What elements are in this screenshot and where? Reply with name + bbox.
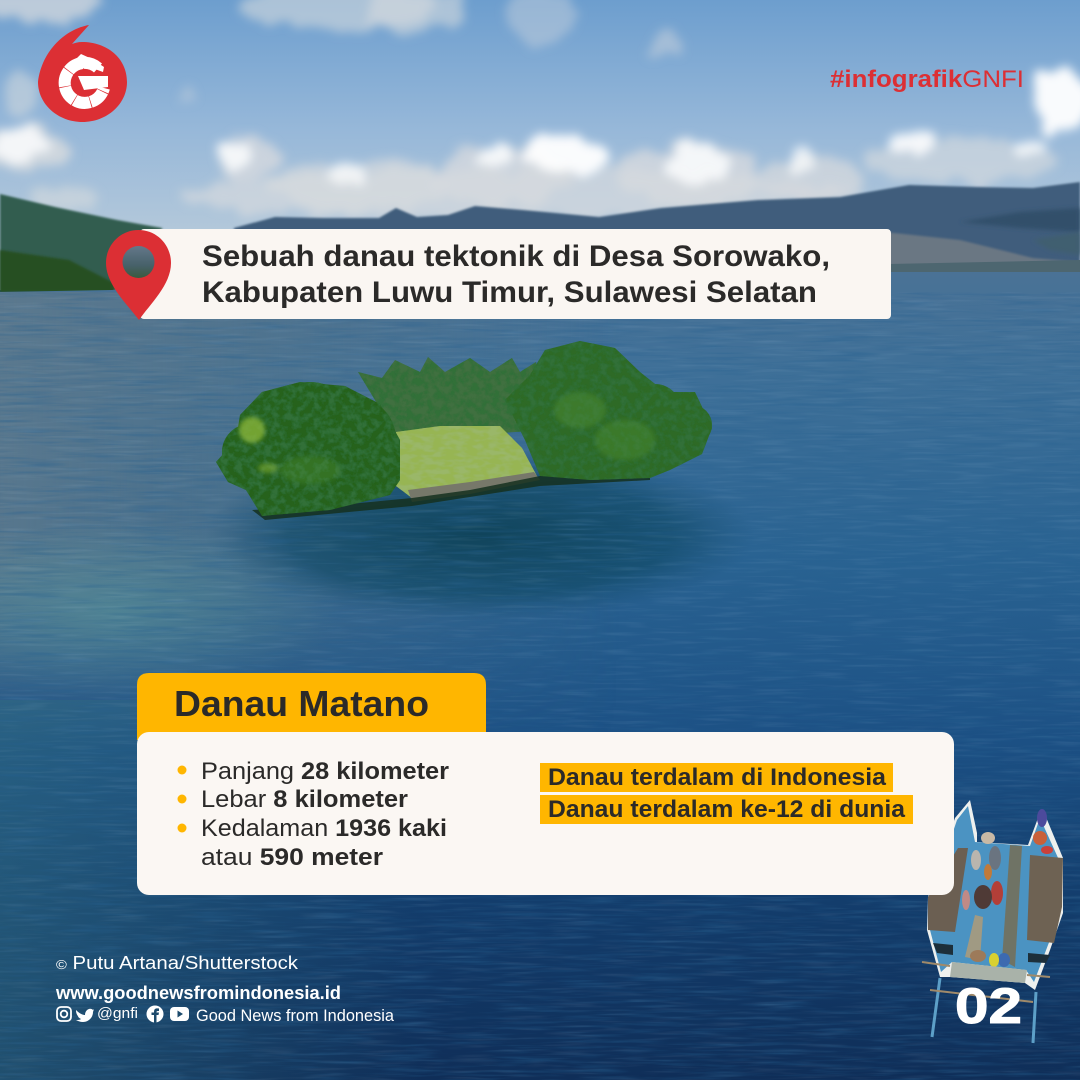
palms	[358, 357, 545, 440]
left hill forest	[0, 250, 114, 292]
emblem ring	[65, 63, 104, 103]
page number: 02	[955, 978, 1022, 1034]
shoreline shadow	[252, 474, 650, 520]
left roof	[928, 848, 968, 932]
icon: instagram	[57, 1007, 71, 1021]
highlight 1: Danau terdalam di Indonesia	[548, 764, 887, 791]
fact: depth: Kedalaman 1936 kaki	[201, 815, 447, 842]
clouds	[0, 0, 1080, 220]
hulls	[927, 800, 1063, 990]
lake water	[0, 272, 1080, 1080]
facts list	[178, 758, 449, 871]
website: www.goodnewsfromindonesia.id	[55, 983, 341, 1003]
left tree	[216, 382, 400, 516]
bullets	[178, 766, 186, 832]
right roof	[1027, 855, 1063, 943]
outrigger poles	[922, 962, 1050, 1002]
rocks	[408, 472, 540, 502]
panel: Danau Matano	[137, 673, 954, 895]
boat	[922, 800, 1063, 1043]
banner panel	[140, 229, 891, 319]
logo emblem	[65, 54, 108, 103]
fact: length: Panjang 28 kilometer	[201, 758, 449, 785]
banner line 1: Sebuah danau tektonik di Desa Sorowako,	[202, 240, 830, 273]
icon: map pin	[106, 230, 171, 320]
mountain lower slopes	[885, 232, 1080, 272]
foliage highlights	[239, 392, 655, 484]
stern rail	[950, 962, 1027, 983]
fact: depth metres: atau 590 meter	[201, 844, 383, 871]
brand name: Good News from Indonesia	[196, 1006, 395, 1025]
windows	[933, 943, 1050, 963]
fact: width: Lebar 8 kilometer	[201, 786, 408, 813]
emblem bar	[78, 76, 108, 90]
island	[216, 341, 712, 520]
banner line 2: Kabupaten Luwu Timur, Sulawesi Selatan	[202, 276, 817, 309]
icon: youtube	[170, 1007, 189, 1021]
icon: twitter	[76, 1009, 94, 1022]
water tint left	[0, 292, 474, 700]
footer credits	[55, 953, 395, 1025]
keels and wakes	[932, 978, 1036, 1043]
logo	[38, 25, 127, 122]
right tree	[505, 341, 712, 480]
hashtag: #infografik GNFI	[830, 66, 1024, 93]
passengers	[962, 809, 1053, 967]
photo credit: © Putu Artana/Shutterstock	[56, 953, 299, 973]
deck	[930, 806, 1060, 982]
icon: facebook	[146, 1006, 164, 1023]
island reflection	[205, 450, 755, 620]
location banner	[106, 229, 891, 320]
facts panel	[137, 732, 954, 895]
mountain shadow	[960, 208, 1080, 232]
center plank	[1002, 845, 1022, 967]
social handle: @gnfi	[97, 1005, 138, 1022]
sky	[0, 0, 1080, 290]
heading: Danau Matano	[174, 683, 429, 724]
grass	[388, 426, 538, 498]
highlight 2: Danau terdalam ke-12 di dunia	[548, 796, 906, 823]
heading tab	[137, 673, 486, 740]
logo mark	[38, 25, 127, 122]
emblem eagle	[75, 54, 104, 72]
shallow teal	[0, 520, 340, 700]
distant mountains	[234, 182, 1080, 272]
water tint lower left	[0, 700, 420, 1080]
water ripples	[0, 292, 1080, 1080]
left hill	[0, 194, 162, 292]
rear plank	[965, 915, 983, 960]
